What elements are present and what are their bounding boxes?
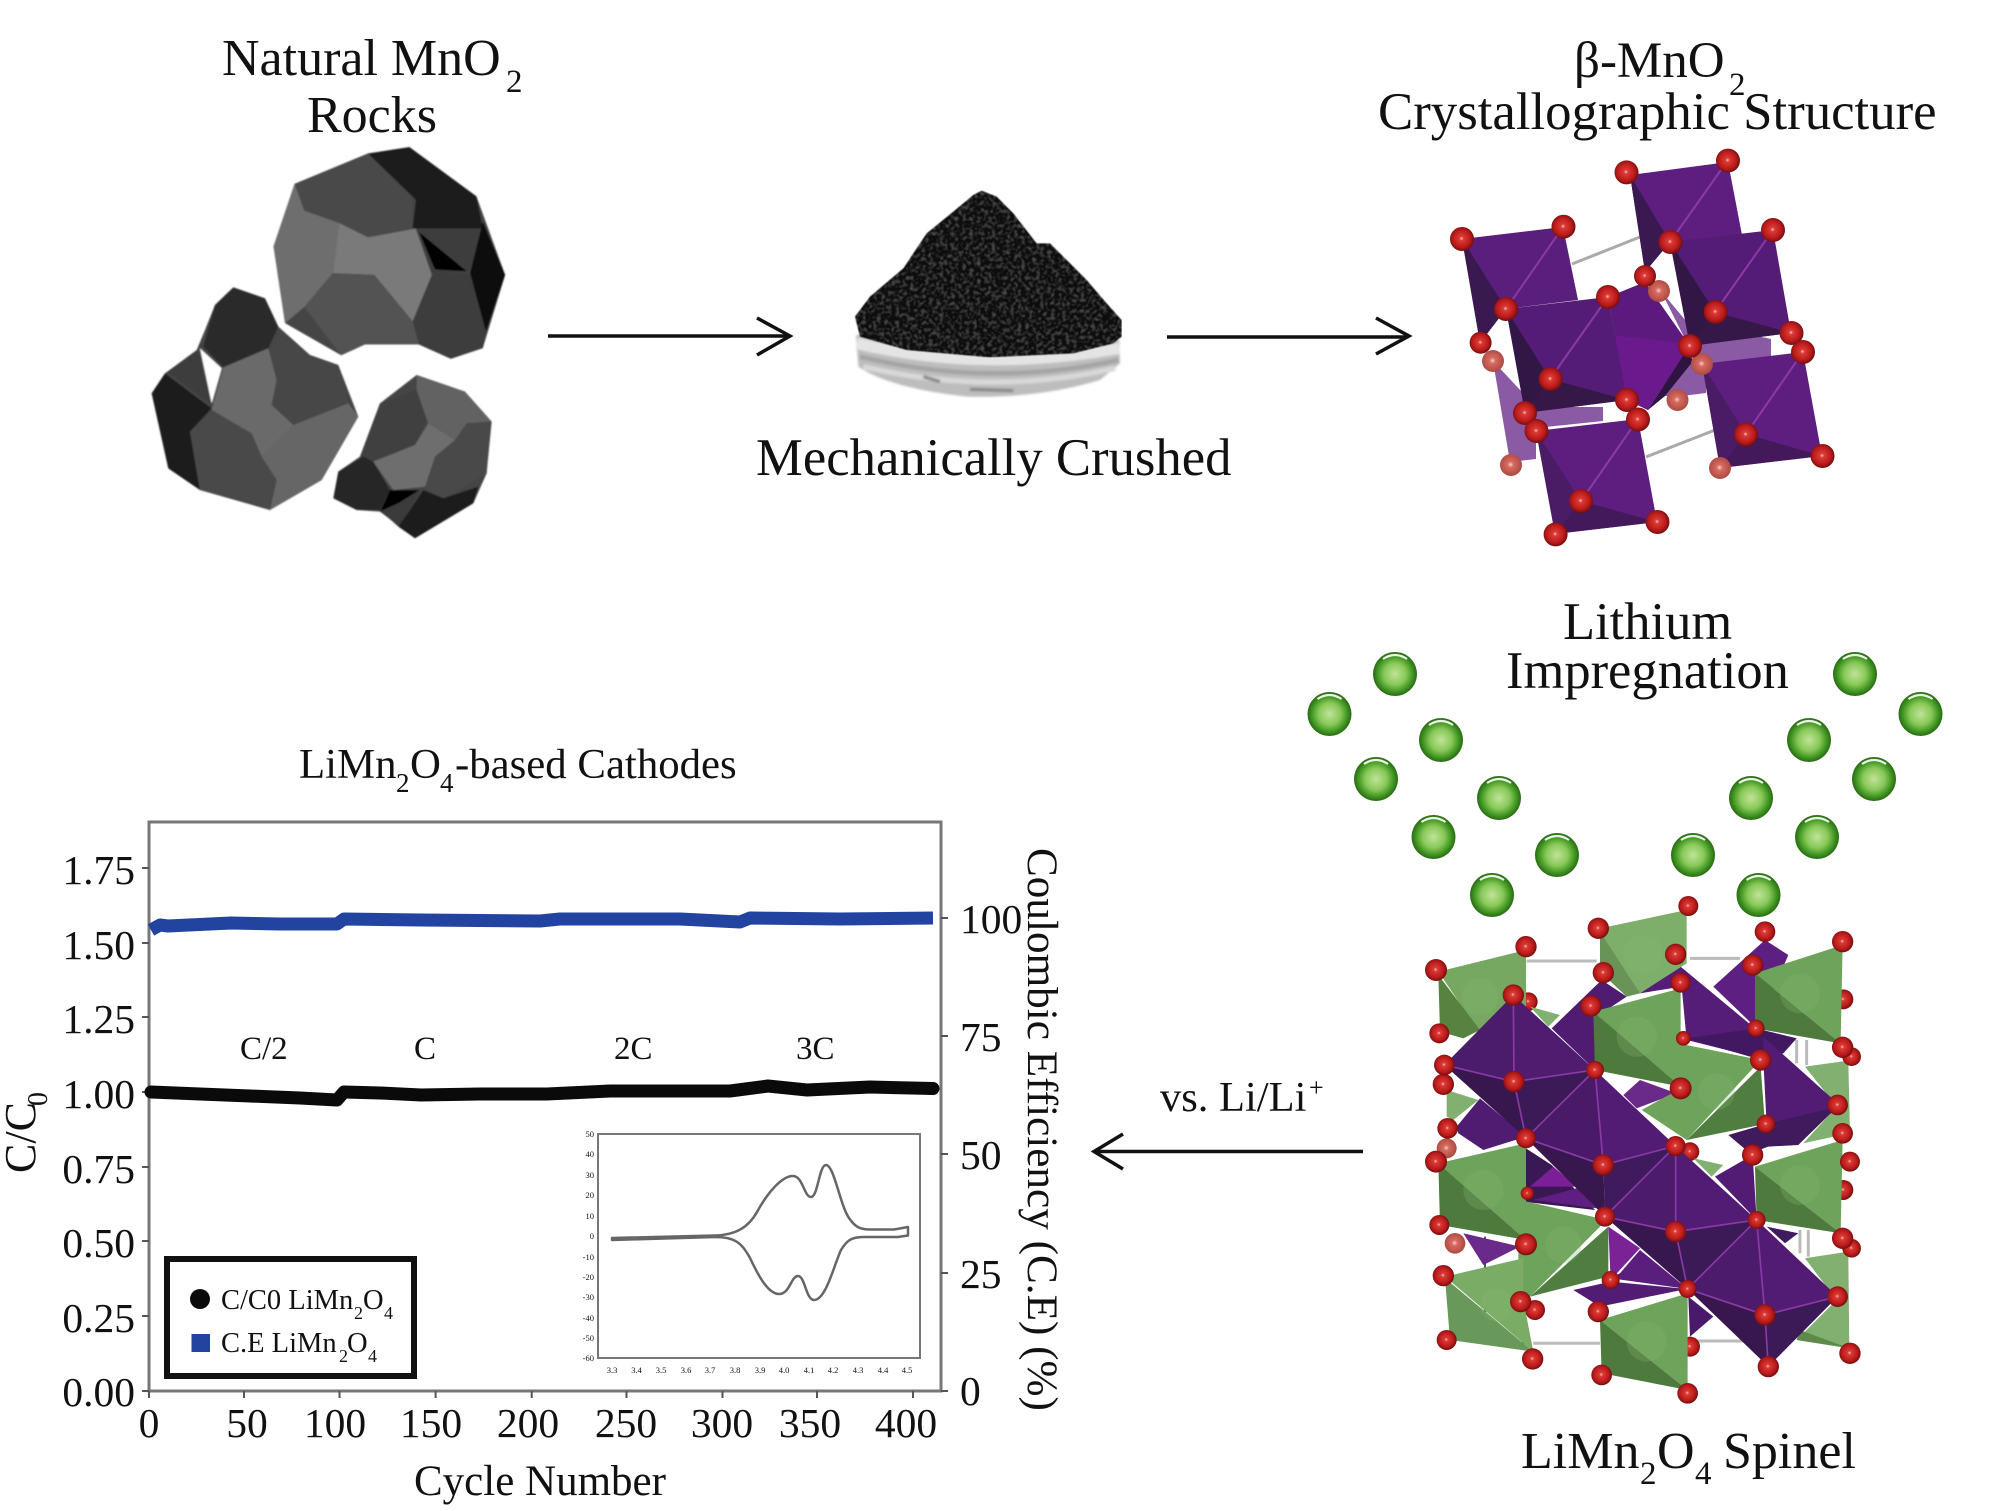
inset: cyclic voltammogram: 4.4 — [878, 1365, 889, 1375]
inset: cyclic voltammogram: 3.8 — [730, 1365, 740, 1375]
axis labels: right coulombic efficiency ticks: 100 — [960, 896, 1022, 942]
label: LiMn2O4 Spinel: LiMn — [1521, 1423, 1639, 1480]
axis labels: right coulombic efficiency ticks: 50 — [960, 1132, 1002, 1178]
heading: LiMn2O4-based Cathodes: -based Cathodes — [455, 741, 737, 788]
label: LiMn2O4 Spinel: 2 — [1640, 1456, 1656, 1492]
legend — [167, 1259, 414, 1376]
inset: cyclic voltammogram: 3.5 — [656, 1365, 666, 1375]
axis title: C/C0: 0 — [23, 1092, 54, 1106]
axis labels: right coulombic efficiency ticks: 25 — [960, 1251, 1002, 1297]
heading: Natural MnO2 Rocks — [222, 30, 522, 144]
heading: LiMn2O4-based Cathodes — [299, 741, 737, 798]
series: C/C0 capacity — [151, 1086, 933, 1100]
octahedra: manganese sites — [1444, 995, 1838, 1367]
heading: beta-MnO2 crystallographic structure — [1378, 33, 1937, 141]
image: beta-MnO2 crystal structure — [1450, 149, 1834, 546]
arrow: powder to beta-MnO2 — [1167, 318, 1409, 354]
heading: Natural MnO2 Rocks: 2 — [506, 64, 522, 100]
arrow: rocks to crushed powder — [548, 318, 790, 355]
label: vs. Li/Li+: vs. Li/Li — [1160, 1074, 1306, 1121]
axis labels: left C/C0 ticks: 0.25 — [62, 1295, 135, 1341]
heading: beta-MnO2 crystallographic structure: Crystallographic Structure — [1378, 83, 1937, 141]
heading: LiMn2O4-based Cathodes: 4 — [440, 768, 454, 798]
rock: lower right — [333, 375, 492, 538]
heading: Natural MnO2 Rocks: Rocks — [307, 87, 437, 144]
label: vs. Li/Li+: + — [1309, 1073, 1324, 1102]
inset: cyclic voltammogram: -40 — [583, 1313, 594, 1323]
inset: cyclic voltammogram — [583, 1129, 920, 1375]
inset: cyclic voltammogram: -50 — [583, 1333, 594, 1343]
legend: O — [347, 1328, 368, 1359]
heading: beta-MnO2 crystallographic structure: β-MnO — [1574, 33, 1725, 89]
axis labels: right coulombic efficiency ticks: 0 — [960, 1368, 981, 1414]
rate labels — [240, 1031, 835, 1067]
heading: Lithium Impregnation — [1506, 593, 1789, 700]
legend: 2 — [339, 1346, 348, 1366]
axis labels: left C/C0 ticks: 1.75 — [62, 847, 135, 893]
heading: Lithium Impregnation: Impregnation — [1506, 642, 1789, 700]
inset: cyclic voltammogram: 10 — [586, 1211, 594, 1221]
axis labels: left C/C0 ticks: 0.75 — [62, 1146, 135, 1192]
axis labels: cycle number ticks — [139, 1400, 937, 1446]
inset: cyclic voltammogram: 3.6 — [681, 1365, 691, 1375]
label: LiMn2O4 Spinel — [1521, 1423, 1856, 1492]
axis labels: left C/C0 ticks: 0.00 — [62, 1369, 135, 1415]
image: crushed powder in dish — [855, 191, 1122, 397]
legend: 2 — [354, 1303, 363, 1323]
axis labels: cycle number ticks: 300 — [691, 1400, 753, 1446]
heading: Natural MnO2 Rocks: Natural MnO — [222, 30, 501, 87]
axis labels: left C/C0 ticks: 1.50 — [62, 922, 135, 968]
legend: 4 — [368, 1346, 377, 1366]
axis labels: right coulombic efficiency ticks — [960, 896, 1022, 1414]
inset: cyclic voltammogram: 50 — [586, 1129, 594, 1139]
image: LiMn2O4 spinel structure — [1425, 896, 1861, 1404]
heading: LiMn2O4-based Cathodes: LiMn — [299, 741, 396, 788]
inset: cyclic voltammogram: 4.1 — [804, 1365, 814, 1375]
chart: capacity retention and coulombic efficiency — [0, 822, 1065, 1505]
axis labels: cycle number ticks: 400 — [875, 1400, 937, 1446]
inset: cyclic voltammogram: -60 — [583, 1353, 594, 1363]
axis labels: cycle number ticks: 50 — [226, 1400, 268, 1446]
tetrahedra: lithium sites — [1438, 935, 1843, 1390]
inset: cyclic voltammogram: 4.0 — [779, 1365, 789, 1375]
inset: cyclic voltammogram: 30 — [586, 1170, 594, 1180]
inset: cyclic voltammogram: 3.4 — [631, 1365, 643, 1375]
axis labels: left C/C0 ticks — [62, 847, 135, 1415]
legend: C.E LiMn — [221, 1328, 337, 1359]
label: LiMn2O4 Spinel: O — [1657, 1423, 1695, 1480]
series: coulombic efficiency — [151, 918, 933, 930]
rate labels: C — [414, 1031, 436, 1067]
rock: lower left — [152, 287, 358, 510]
inset: cyclic voltammogram: 3.9 — [755, 1365, 765, 1375]
inset: cyclic voltammogram: 20 — [586, 1190, 594, 1200]
axis labels: left C/C0 ticks: 1.00 — [62, 1071, 135, 1117]
label: LiMn2O4 Spinel: Spinel — [1723, 1423, 1856, 1480]
heading: LiMn2O4-based Cathodes: 2 — [396, 768, 410, 798]
inset: cyclic voltammogram: -10 — [583, 1252, 594, 1262]
rate labels: 2C — [614, 1031, 653, 1067]
inset: cyclic voltammogram: 4.3 — [853, 1365, 863, 1375]
label: Mechanically Crushed: Mechanically Crushed — [756, 429, 1232, 487]
axis labels: cycle number ticks: 250 — [595, 1400, 657, 1446]
label: LiMn2O4 Spinel: 4 — [1695, 1456, 1712, 1492]
rate labels: 3C — [796, 1031, 835, 1067]
axis labels: left C/C0 ticks: 0.50 — [62, 1220, 135, 1266]
inset: cyclic voltammogram: 4.2 — [828, 1365, 838, 1375]
icons: lithium spheres — [1308, 652, 1942, 917]
rock: large upper — [274, 147, 505, 359]
rate labels: C/2 — [240, 1031, 288, 1067]
inset: cyclic voltammogram: 4.5 — [902, 1365, 912, 1375]
axis labels: cycle number ticks: 100 — [304, 1400, 366, 1446]
legend: C/C0 LiMn — [221, 1285, 353, 1316]
heading: Lithium Impregnation: Lithium — [1563, 593, 1732, 651]
axis labels: cycle number ticks: 150 — [400, 1400, 462, 1446]
inset: cyclic voltammogram: 3.3 — [607, 1365, 617, 1375]
inset: cyclic voltammogram: 40 — [586, 1149, 594, 1159]
heading: beta-MnO2 crystallographic structure: 2 — [1729, 67, 1746, 103]
axis labels: cycle number ticks: 0 — [139, 1400, 159, 1446]
inset: cyclic voltammogram: -20 — [583, 1272, 594, 1282]
legend: O — [363, 1285, 384, 1316]
image: natural MnO2 rocks — [152, 147, 505, 538]
axis labels: right coulombic efficiency ticks: 75 — [960, 1014, 1002, 1060]
arrow: spinel to cathode chart — [1094, 1134, 1363, 1169]
heading: LiMn2O4-based Cathodes: O — [410, 741, 441, 788]
axis title: Coulombic Efficiency: Coulombic Efficiency (C.E) (%) — [1018, 848, 1065, 1411]
axis labels: cycle number ticks: 350 — [779, 1400, 841, 1446]
legend: 4 — [384, 1303, 393, 1323]
axis labels: left C/C0 ticks: 1.25 — [62, 996, 135, 1042]
inset: cyclic voltammogram: 3.7 — [705, 1365, 715, 1375]
axis title: Cycle Number: Cycle Number — [414, 1458, 666, 1505]
inset: cyclic voltammogram: 0 — [590, 1231, 594, 1241]
atoms: oxygen — [1425, 896, 1861, 1404]
inset: cyclic voltammogram: -30 — [583, 1292, 594, 1302]
axis labels: cycle number ticks: 200 — [497, 1400, 559, 1446]
